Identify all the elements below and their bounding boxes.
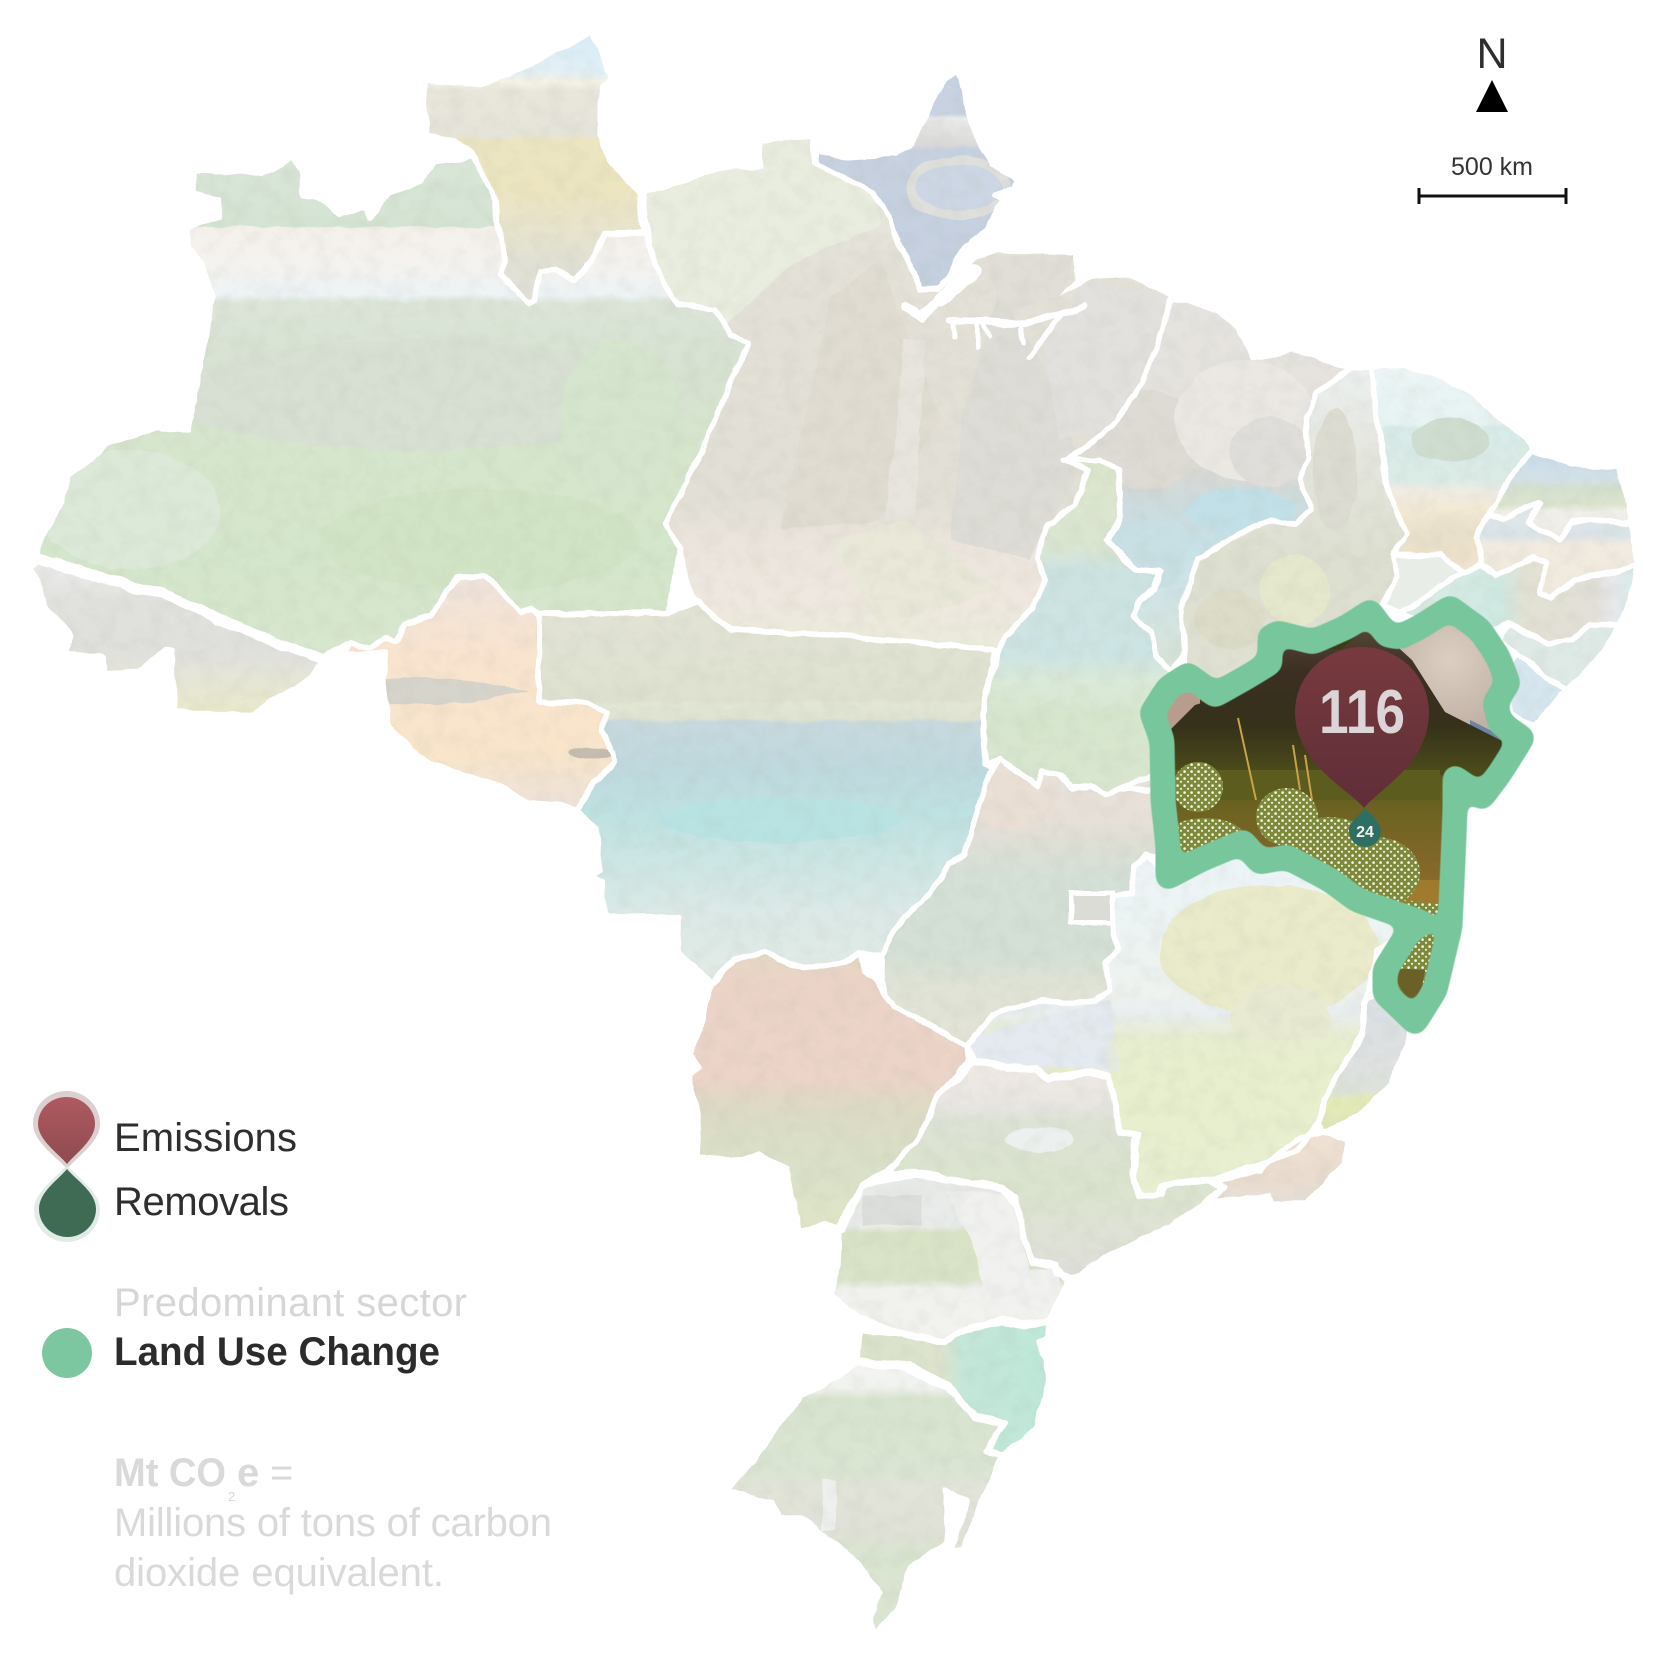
state: Ceara <box>1374 368 1530 570</box>
removals pin <box>1349 808 1381 847</box>
state: Amapa <box>818 74 1014 287</box>
state: Piaui <box>1183 370 1405 678</box>
unit suffix: e <box>237 1451 259 1495</box>
state: Parana <box>834 1178 1065 1339</box>
north label: N <box>1476 30 1508 78</box>
sector heading: Predominant sector <box>114 1281 467 1325</box>
state: Tocantins <box>986 462 1169 792</box>
state: Alagoas <box>1500 623 1617 690</box>
north arrow <box>1476 30 1508 112</box>
state: Rio Grande do Norte <box>1493 454 1628 536</box>
scale label: 500 km <box>1451 153 1533 181</box>
state: Pernambuco urban patch <box>1383 553 1463 613</box>
state: Santa Catarina <box>860 1325 1046 1452</box>
state: Paraiba <box>1477 503 1638 598</box>
sector swatch <box>42 1328 92 1378</box>
state: Goias <box>884 762 1156 1042</box>
unit explanation line 2: dioxide equivalent. <box>114 1551 444 1595</box>
state: Mato Grosso do Sul <box>692 954 966 1228</box>
emissions pin <box>1295 647 1429 808</box>
state: Acre <box>33 564 318 713</box>
legend: predominant sector <box>42 1281 467 1378</box>
legend removals label: Removals <box>114 1180 289 1224</box>
legend emissions drop <box>33 1091 100 1169</box>
Bahia photo <box>1140 600 1540 1040</box>
emissions value: 116 <box>1319 678 1405 747</box>
unit note <box>114 1451 552 1595</box>
map photo grain overlay <box>45 69 1544 1390</box>
sector label: Land Use Change <box>114 1330 440 1374</box>
equals: = <box>270 1451 293 1495</box>
state: Minas Gerais <box>970 859 1394 1194</box>
state: Mato Grosso <box>535 600 1000 990</box>
state: Maranhao <box>1076 302 1344 668</box>
state: Pernambuco <box>1406 561 1634 641</box>
north triangle <box>1476 80 1508 112</box>
state: Rio de Janeiro <box>1216 1135 1345 1202</box>
state: Bahia highlighted <box>1140 600 1540 1040</box>
legend removals drop fill <box>39 1169 96 1237</box>
state: Amazonas <box>40 158 746 654</box>
state: Roraima <box>426 36 642 300</box>
legend emissions label: Emissions <box>114 1116 297 1160</box>
legend emissions drop fill <box>38 1097 95 1164</box>
state: Para <box>640 130 1180 660</box>
unit explanation line 1: Millions of tons of carbon <box>114 1501 552 1545</box>
removals value: 24 <box>1356 824 1374 841</box>
state: Sao Paulo <box>893 1065 1218 1275</box>
state: Rio Grande do Sul <box>732 1365 998 1630</box>
state: Espirito Santo <box>1322 998 1408 1129</box>
scale bar <box>1419 153 1566 204</box>
state: Rondonia <box>348 578 612 807</box>
scale line <box>1419 188 1566 204</box>
Bahia predominant sector ring <box>1152 608 1522 1022</box>
legend: emissions and removals <box>33 1091 297 1242</box>
state: Sergipe <box>1500 653 1567 727</box>
subscript: 2 <box>228 1489 235 1504</box>
legend removals drop halo <box>34 1165 100 1242</box>
Amazon river mouth islands <box>906 239 1085 357</box>
unit abbreviation: Mt CO <box>114 1451 226 1495</box>
